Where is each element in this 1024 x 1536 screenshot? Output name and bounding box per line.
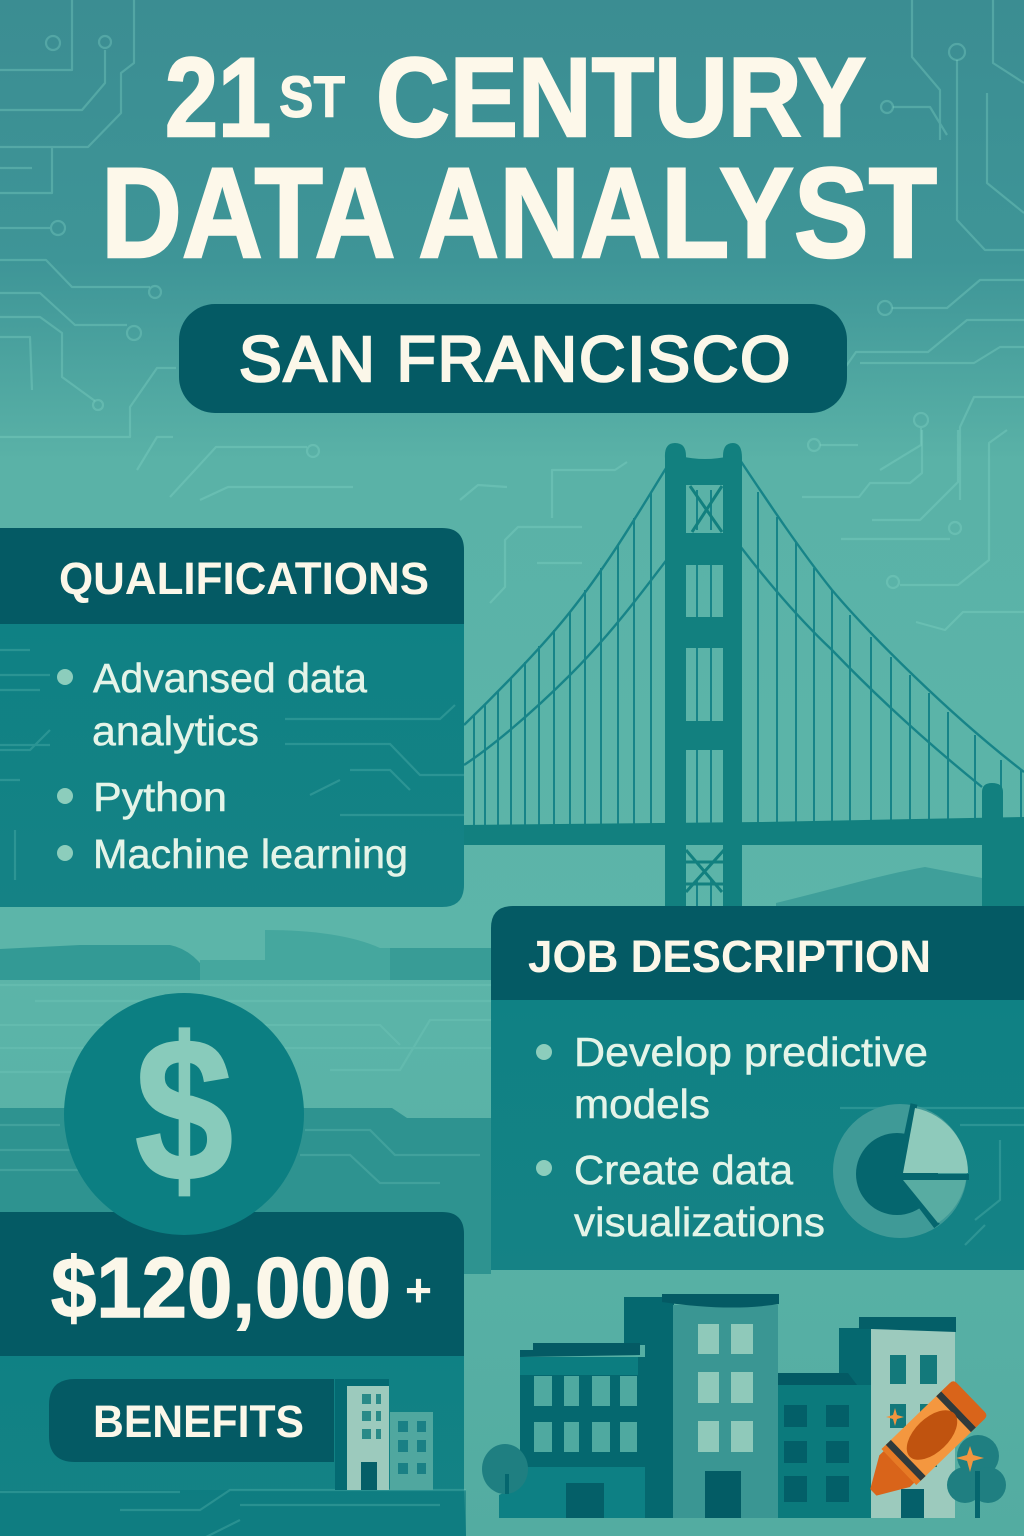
circuit traces background [0, 0, 1024, 630]
bullet: python: Python [93, 774, 227, 820]
suspender cables [464, 460, 1024, 825]
bullet: advanced data analytics: Advansed data [93, 655, 367, 701]
job description list [536, 1029, 928, 1245]
bridge hill [776, 867, 982, 906]
tree right [947, 1435, 1006, 1518]
panel: salary and benefits [0, 993, 466, 1536]
bridge deck [464, 817, 1024, 845]
icon: pie chart [833, 1104, 969, 1238]
panel: qualifications [0, 528, 464, 907]
salary header [0, 1212, 464, 1356]
title: CENTURY [376, 35, 866, 160]
icon: dollar coin [64, 993, 304, 1235]
building D [859, 1317, 956, 1518]
lower circuit band [0, 985, 491, 1274]
icon: orange crayon [856, 1380, 988, 1510]
location badge: SAN FRANCISCO [239, 323, 790, 395]
icon: dollar coin: $ [135, 996, 233, 1224]
panel: job description [491, 906, 1024, 1270]
bullet: create data visualizations: visualizations [574, 1199, 825, 1245]
building B rear [624, 1297, 674, 1518]
qualifications header [0, 528, 464, 624]
bullet: develop predictive models [536, 1029, 928, 1127]
tower [665, 443, 742, 906]
building A [499, 1343, 645, 1518]
bullet: develop predictive models: Develop predictive [574, 1029, 928, 1075]
benefits badge: BENEFITS [93, 1396, 304, 1447]
salary header: $120,000 [51, 1241, 391, 1336]
title [101, 35, 937, 285]
building C [778, 1328, 872, 1518]
building B [662, 1294, 779, 1518]
location badge [179, 304, 847, 413]
bullet: create data visualizations: Create data [574, 1147, 793, 1193]
job description header: JOB DESCRIPTION [528, 931, 931, 982]
icon: benefits buildings [335, 1379, 433, 1490]
right pier [982, 783, 1024, 906]
bullet: advanced data analytics [57, 655, 367, 754]
icon: sparkles [886, 1408, 984, 1472]
title: 21 [165, 35, 271, 160]
salary header: + [405, 1264, 432, 1316]
distant hills [0, 930, 491, 980]
qualifications header: QUALIFICATIONS [59, 553, 429, 604]
benefits badge [49, 1379, 334, 1462]
illustration: city skyline [482, 1294, 1006, 1518]
bullet: develop predictive models: models [574, 1081, 710, 1127]
bullet: create data visualizations [536, 1147, 825, 1245]
qualifications list [57, 655, 408, 877]
golden gate bridge [464, 443, 1024, 906]
bullet: machine learning: Machine learning [93, 831, 408, 877]
job description header [491, 906, 1024, 1000]
tree left [482, 1444, 528, 1494]
title: ST [279, 65, 345, 130]
bullet: advanced data analytics: analytics [92, 708, 259, 754]
